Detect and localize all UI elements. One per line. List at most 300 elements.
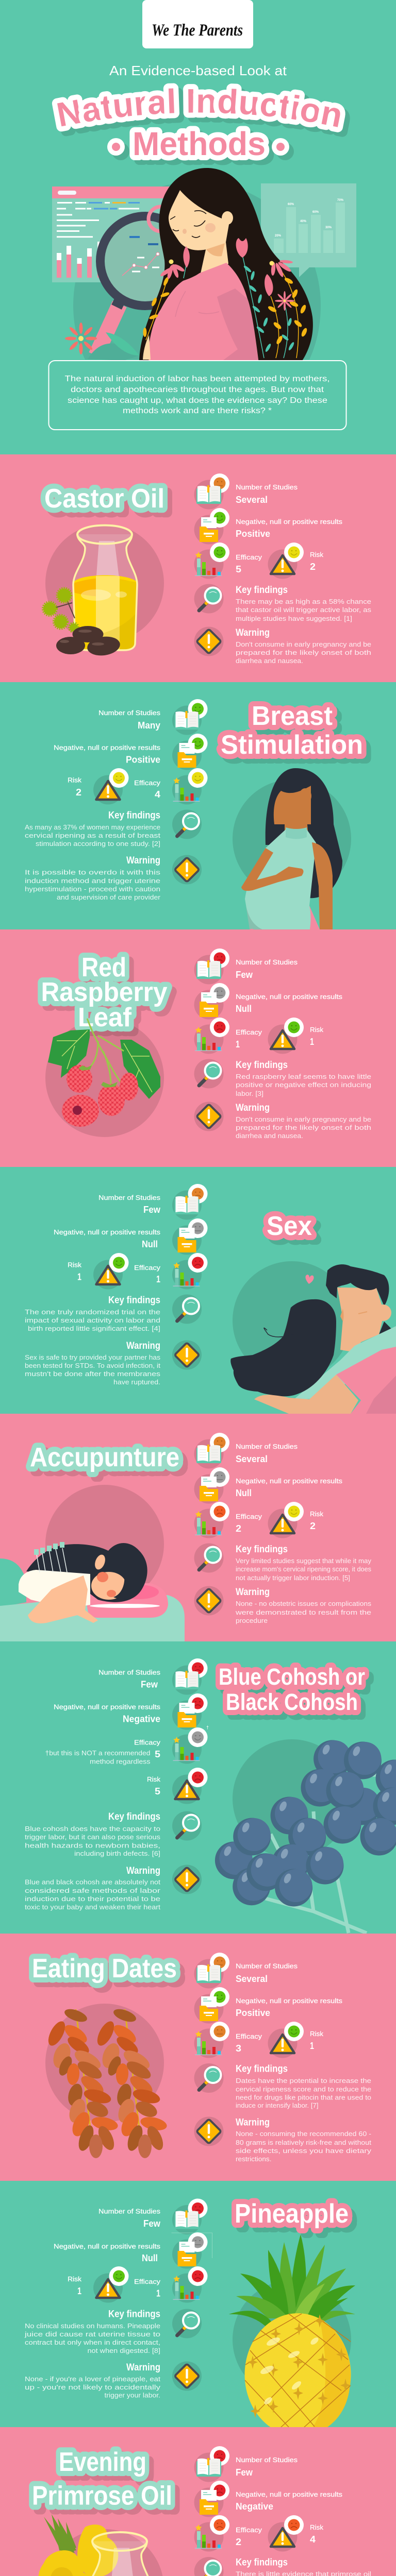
key findings [25, 1295, 160, 1332]
warning: procedure [236, 1617, 268, 1624]
risk [310, 2524, 324, 2545]
number of studies [236, 959, 298, 980]
title: red raspberry leaf: Raspberry [41, 977, 168, 1007]
results [236, 2491, 342, 2512]
efficacy: Efficacy [236, 2033, 262, 2040]
results: Negative [236, 2501, 273, 2512]
warning: Warning [126, 2362, 160, 2373]
key findings: not when digested. [8] [88, 2347, 160, 2354]
results: Negative [123, 1714, 160, 1724]
results: Null [236, 1004, 252, 1014]
risk: Risk [68, 2276, 82, 2283]
risk [310, 2030, 324, 2051]
icon: number of studies [194, 1433, 229, 1468]
warning: Blue and black cohosh are absolutely not [25, 1878, 161, 1886]
icon: efficacy [172, 1727, 207, 1764]
risk: Risk [68, 1261, 82, 1268]
panel: accupunture [0, 1414, 396, 1641]
warning: mustn't be done after the membranes [25, 1370, 160, 1378]
results: Positive [126, 754, 160, 765]
icon: risk [268, 1502, 304, 1538]
icon: efficacy [194, 2515, 229, 2551]
number of studies: Number of Studies [236, 2456, 298, 2464]
key findings: No clinical studies on humans. Pineapple [25, 2323, 160, 2330]
results: Negative, null or positive results [54, 1229, 160, 1236]
key findings: Very limited studies suggest that while it may [236, 1557, 372, 1565]
hero illustration: pregnant woman with data: 30% [325, 226, 332, 229]
results: Negative, null or positive results [236, 1997, 342, 2005]
icon: results [194, 2481, 229, 2517]
icon: results [194, 508, 229, 544]
efficacy and note: Efficacy [134, 1739, 161, 1747]
key findings: that castor oil will trigger active labor, as [236, 606, 371, 614]
key findings: Key findings [108, 2309, 160, 2319]
icon: efficacy [194, 1502, 229, 1538]
icon: number of studies [194, 473, 229, 509]
key findings: Dates have the potential to increase the [236, 2077, 371, 2084]
intro text box: doctors and apothecaries throughout the ages. But now that [71, 385, 324, 394]
warning: None - if you're a lover of pineapple, eat [25, 2376, 161, 2383]
icon: key findings [172, 1811, 202, 1840]
warning: Don't consume in early pregnancy and be [236, 641, 371, 648]
title: red raspberry leaf [41, 953, 168, 1032]
icon: key findings [194, 1059, 224, 1088]
results: Negative, null or positive results [54, 2243, 160, 2250]
warning: prepared for the likely onset of both [236, 1124, 371, 1131]
icon: risk [268, 543, 304, 579]
key findings [25, 810, 161, 848]
icon: key findings [194, 1544, 224, 1572]
title: evening primrose oil [32, 2447, 172, 2511]
panel: pineapple [0, 2181, 396, 2436]
title: castor oil: Castor Oil [44, 484, 164, 514]
results: Negative, null or positive results [236, 993, 342, 1001]
risk: 5 [155, 1786, 160, 1797]
title: accupunture: Accupunture [30, 1443, 179, 1472]
risk: 2 [310, 1521, 316, 1531]
title: blue cohosh or black cohosh [219, 1664, 365, 1715]
warning [25, 855, 160, 901]
risk [310, 1026, 324, 1047]
warning: hyperstimulation - proceed with caution [25, 886, 160, 893]
key findings: impact of sexual activity on labor and [25, 1317, 160, 1324]
hero illustration: pregnant woman with data: 70% [337, 199, 344, 202]
number of studies: Number of Studies [98, 1194, 160, 1201]
key findings: Key findings [236, 2557, 288, 2568]
efficacy [236, 1513, 262, 1534]
key findings: Key findings [108, 1295, 160, 1306]
results: Positive [236, 529, 270, 539]
risk: 1 [310, 1037, 314, 1047]
key findings: Key findings [236, 2064, 288, 2074]
risk: Risk [310, 1511, 324, 1518]
results [236, 518, 342, 539]
number of studies: Several [236, 1974, 268, 1984]
number of studies: Many [138, 720, 160, 731]
number of studies: Number of Studies [98, 2208, 160, 2215]
efficacy and note [45, 1725, 209, 1765]
intro text box [48, 361, 346, 430]
icon: number of studies [194, 2446, 229, 2482]
warning: Warning [236, 628, 270, 638]
warning [25, 1866, 161, 1911]
key findings [236, 585, 371, 622]
efficacy: 2 [236, 2537, 241, 2547]
number of studies: Few [141, 1680, 158, 1690]
results [236, 993, 342, 1014]
icon: key findings [172, 2309, 202, 2338]
key findings: contract but only when in direct contact, [25, 2339, 160, 2346]
risk: 1 [77, 1272, 81, 1282]
number of studies: Number of Studies [236, 484, 298, 491]
efficacy: Efficacy [236, 1029, 262, 1036]
efficacy: 4 [155, 789, 160, 800]
icon: number of studies [172, 1184, 207, 1220]
results [54, 2243, 160, 2263]
key findings: As many as 37% of women may experience [25, 824, 160, 831]
results: Negative, null or positive results [236, 1478, 342, 1485]
results [236, 1478, 342, 1498]
warning [236, 628, 371, 665]
efficacy and note: † [206, 1725, 209, 1730]
hero illustration: pregnant woman with data: 40% [300, 220, 307, 223]
key findings: induce or intensify labor. [7] [236, 2102, 319, 2109]
icon: warning [194, 626, 224, 656]
hero illustration: pregnant woman with data: 60% [288, 203, 294, 206]
subtitle: An Evidence-based Look at [109, 63, 287, 78]
icon: key findings [172, 1294, 202, 1324]
illustration: castor oil jar [43, 524, 164, 657]
key findings: Key findings [108, 810, 160, 821]
efficacy and note: method regardless [90, 1758, 151, 1765]
icon: results [172, 734, 207, 770]
warning: have ruptured. [113, 1379, 160, 1386]
efficacy [236, 554, 262, 574]
warning: up - you're not likely to accidentally [25, 2384, 161, 2391]
icon: number of studies [194, 948, 229, 984]
results: Null [142, 1239, 158, 1249]
key findings: Key findings [108, 1811, 160, 1822]
icon: risk [93, 2266, 129, 2303]
warning: Don't consume in early pregnancy and be [236, 1116, 371, 1123]
key findings: labor. [3] [236, 1090, 263, 1097]
key findings: Red raspberry leaf seems to have little [236, 1073, 371, 1080]
warning: induction method and trigger uterine [25, 877, 160, 885]
number of studies [236, 2456, 298, 2478]
title: eating dates: Eating Dates [32, 1954, 177, 1984]
risk: Risk [310, 2030, 324, 2038]
efficacy [236, 1029, 262, 1049]
panel: eating dates [0, 1934, 396, 2181]
illustration: couple embracing [230, 1261, 396, 1414]
number of studies: Number of Studies [236, 959, 298, 966]
key findings: There may be as high as a 58% chance [236, 598, 371, 605]
results: Negative, null or positive results [54, 1703, 160, 1710]
icon: efficacy [194, 2022, 229, 2058]
title [52, 83, 350, 165]
title: red raspberry leaf: Leaf [78, 1003, 132, 1032]
key findings: multiple studies have suggested. [1] [236, 615, 352, 622]
panel: header [48, 0, 356, 430]
icon: results [194, 1467, 229, 1503]
number of studies: Few [236, 970, 253, 980]
number of studies [98, 2208, 161, 2229]
efficacy [134, 779, 161, 800]
illustration: pineapple [229, 2234, 355, 2436]
efficacy [134, 1264, 161, 1284]
key findings: The one truly randomized trial on the [25, 1309, 160, 1316]
warning: Warning [126, 1341, 160, 1351]
number of studies: Number of Studies [236, 1443, 298, 1450]
logo box [142, 0, 253, 48]
efficacy: 1 [236, 1039, 240, 1049]
key findings: birth reported little significant effect. [4] [28, 1325, 160, 1332]
key findings: juice did cause rat uterine tissue to [24, 2331, 160, 2338]
risk [310, 1511, 324, 1531]
key findings [24, 2309, 160, 2354]
key findings: increase mom's cervical ripening score, it does [236, 1566, 371, 1573]
warning: been tested for STDs. To avoid infection, it [25, 1362, 161, 1369]
icon: key findings [194, 2063, 224, 2093]
number of studies: Number of Studies [98, 709, 160, 717]
title: evening primrose oil: Primrose Oil [32, 2481, 172, 2511]
warning [25, 2362, 161, 2399]
results: Null [236, 1488, 252, 1498]
efficacy: Efficacy [134, 1264, 161, 1272]
raspberries and leaves [48, 1019, 160, 1127]
key findings: stimulation according to one study. [2] [36, 840, 160, 848]
number of studies: Several [236, 1454, 268, 1464]
risk: 1 [310, 2041, 314, 2051]
risk: 2 [76, 787, 81, 798]
icon: results [194, 1987, 229, 2024]
key findings [236, 1060, 371, 1097]
icon: efficacy [172, 768, 207, 805]
warning: prepared for the likely onset of both [236, 649, 371, 656]
key findings: Key findings [236, 1544, 288, 1555]
results [54, 744, 160, 765]
icon: risk [268, 1018, 304, 1054]
key findings: cervical ripening as a result of breast [25, 832, 161, 839]
risk [68, 777, 82, 798]
icon: number of studies [172, 699, 207, 735]
key findings [236, 2064, 371, 2109]
icon: warning [194, 1101, 224, 1131]
key findings: cervical ripeness score and to reduce the [236, 2086, 371, 2093]
icon: number of studies [194, 1953, 229, 1989]
results: Positive [236, 2008, 270, 2018]
key findings: not actually trigger labor induction. [5] [236, 1574, 350, 1582]
key findings: including birth defects. [6] [74, 1850, 160, 1857]
warning: Sex is safe to try provided your partner has [25, 1354, 160, 1361]
number of studies [236, 1443, 298, 1464]
title: blue cohosh or black cohosh: Black Cohosh [226, 1689, 358, 1715]
icon: results [172, 1693, 207, 1730]
warning: It is possible to overdo it with this [25, 869, 160, 876]
key findings: Key findings [236, 585, 288, 596]
number of studies: Number of Studies [236, 1963, 298, 1970]
risk: 2 [310, 562, 316, 572]
efficacy: Efficacy [236, 554, 262, 561]
intro text box: methods work and are there risks? * [123, 406, 272, 415]
efficacy: 1 [156, 2289, 160, 2299]
warning: diarrhea and nausea. [236, 657, 303, 665]
icon: risk [268, 2022, 304, 2058]
icon: results [171, 2232, 212, 2269]
warning: None - no obstetric issues or complications [236, 1600, 371, 1607]
number of studies: Number of Studies [98, 1669, 160, 1676]
warning: toxic to your baby and weaken their heart [25, 1904, 161, 1911]
key findings: need for drugs like pitocin that are used to [236, 2094, 371, 2101]
efficacy: Efficacy [236, 2527, 262, 2534]
key findings [236, 1544, 372, 1582]
number of studies: Few [143, 1205, 161, 1215]
intro text box: The natural induction of labor has been attempted by mothers, [65, 375, 330, 383]
logo box: We The Parents [152, 21, 243, 40]
icon: warning [194, 1586, 224, 1616]
icon: efficacy [172, 2266, 207, 2303]
results: Null [142, 2253, 158, 2263]
efficacy: Efficacy [236, 1513, 262, 1520]
title: blue cohosh or black cohosh: Blue Cohosh or [219, 1664, 365, 1690]
warning: 80 grams is relatively risk-free and without [236, 2139, 372, 2146]
risk: Risk [310, 551, 324, 558]
hero illustration: pregnant woman with data: 20% [275, 234, 282, 238]
number of studies [98, 709, 160, 731]
hero illustration: pregnant woman with data: 60% [312, 211, 319, 214]
warning [25, 1341, 161, 1386]
key findings: health hazards to newborn babies, [25, 1842, 160, 1850]
icon: efficacy [172, 1253, 207, 1289]
icon: risk [93, 1253, 129, 1289]
warning: restrictions. [236, 2156, 271, 2163]
illustration: woman receiving acupuncture [0, 1485, 185, 1641]
number of studies [236, 1963, 298, 1984]
icon: number of studies [172, 1658, 207, 1695]
icon: number of studies [172, 2199, 207, 2234]
icon: warning [172, 2362, 202, 2391]
icon: warning [194, 2116, 224, 2146]
key findings: Key findings [236, 1060, 288, 1071]
risk [68, 2276, 82, 2296]
risk: Risk [310, 2524, 324, 2531]
warning: Warning [236, 1587, 270, 1598]
risk: 4 [310, 2534, 316, 2545]
panel: blue cohosh or black cohosh [0, 1641, 396, 1934]
efficacy: Efficacy [134, 2278, 161, 2285]
icon: warning [172, 1341, 202, 1369]
icon: risk [172, 1768, 207, 1804]
key findings: Blue cohosh does have the capacity to [25, 1825, 160, 1833]
warning: trigger your labor. [104, 2392, 160, 2399]
icon: warning [172, 855, 202, 884]
number of studies: Few [143, 2218, 161, 2229]
illustration: dates [45, 2004, 168, 2158]
icon: results [172, 1218, 207, 1255]
icon: warning [172, 1865, 202, 1894]
number of studies: Few [236, 2467, 253, 2478]
results [54, 1703, 160, 1724]
efficacy and note: 5 [155, 1749, 160, 1759]
warning: induction due to their potential to be [25, 1895, 160, 1903]
warning [235, 1587, 371, 1624]
efficacy [236, 2033, 262, 2054]
icon: key findings [172, 810, 202, 839]
risk: 1 [77, 2286, 81, 2296]
title: breast stimulation: Stimulation [221, 730, 363, 760]
results: Negative, null or positive results [236, 518, 342, 526]
icon: key findings [194, 2557, 224, 2576]
warning: considered safe methods of labor [25, 1887, 160, 1894]
warning: were demonstrated to result from the [235, 1609, 371, 1616]
title: Methods [133, 125, 266, 162]
title: evening primrose oil: Evening [59, 2447, 146, 2477]
title: pineapple: Pineapple [235, 2199, 349, 2229]
illustration: pregnant woman [233, 768, 351, 933]
warning: and supervision of care provider [57, 894, 160, 901]
risk: Risk [68, 777, 82, 784]
panel: sex [0, 1167, 396, 1414]
efficacy: 3 [236, 2043, 241, 2054]
key findings: trigger labor, but it can also pose serious [25, 1834, 160, 1841]
title: Natural Induction [52, 83, 350, 137]
icon: efficacy [194, 543, 229, 579]
efficacy [134, 2278, 161, 2299]
warning: side effects, unless you have dietary [236, 2147, 372, 2155]
warning: diarrhea and nausea. [236, 1132, 303, 1140]
results: Negative, null or positive results [54, 744, 160, 751]
key findings [236, 2557, 371, 2576]
hero illustration: pregnant woman with data [52, 168, 356, 363]
key findings [25, 1811, 160, 1857]
risk [68, 1261, 82, 1282]
risk [147, 1776, 161, 1797]
warning: Warning [236, 1103, 270, 1113]
number of studies: Several [236, 495, 268, 505]
illustration: primrose oil bottle and flowers [38, 2514, 164, 2576]
panel: breast stimulation [0, 682, 396, 933]
results: Negative, null or positive results [236, 2491, 342, 2498]
number of studies [236, 484, 298, 505]
efficacy: 1 [156, 1274, 160, 1284]
title: sex: Sex [267, 1211, 312, 1241]
illustration: cohosh berries [215, 1739, 396, 1933]
efficacy: 2 [236, 1523, 241, 1534]
key findings: positive or negative effect on inducing [236, 1081, 371, 1089]
efficacy and note: †but this is NOT a recommended [45, 1750, 151, 1757]
warning: Warning [126, 1866, 160, 1876]
efficacy: Efficacy [134, 779, 161, 787]
efficacy: 5 [236, 564, 241, 574]
risk [310, 551, 324, 572]
panel: red raspberry leaf [0, 929, 396, 1167]
title: breast stimulation [221, 701, 363, 760]
icon: key findings [194, 584, 224, 613]
warning: None - consuming the recommended 60 - [236, 2130, 371, 2138]
warning [236, 2117, 372, 2163]
risk: Risk [310, 1026, 324, 1033]
title: red raspberry leaf: Red [81, 953, 126, 982]
title: breast stimulation: Breast [252, 701, 333, 731]
illustration: raspberries [45, 1019, 164, 1137]
number of studies [98, 1194, 161, 1215]
results [236, 1997, 342, 2018]
icon: risk [93, 768, 129, 805]
panel: evening primrose oil [0, 2427, 396, 2576]
warning: Warning [126, 855, 160, 866]
icon: results [194, 983, 229, 1019]
panel: castor oil [0, 454, 396, 682]
